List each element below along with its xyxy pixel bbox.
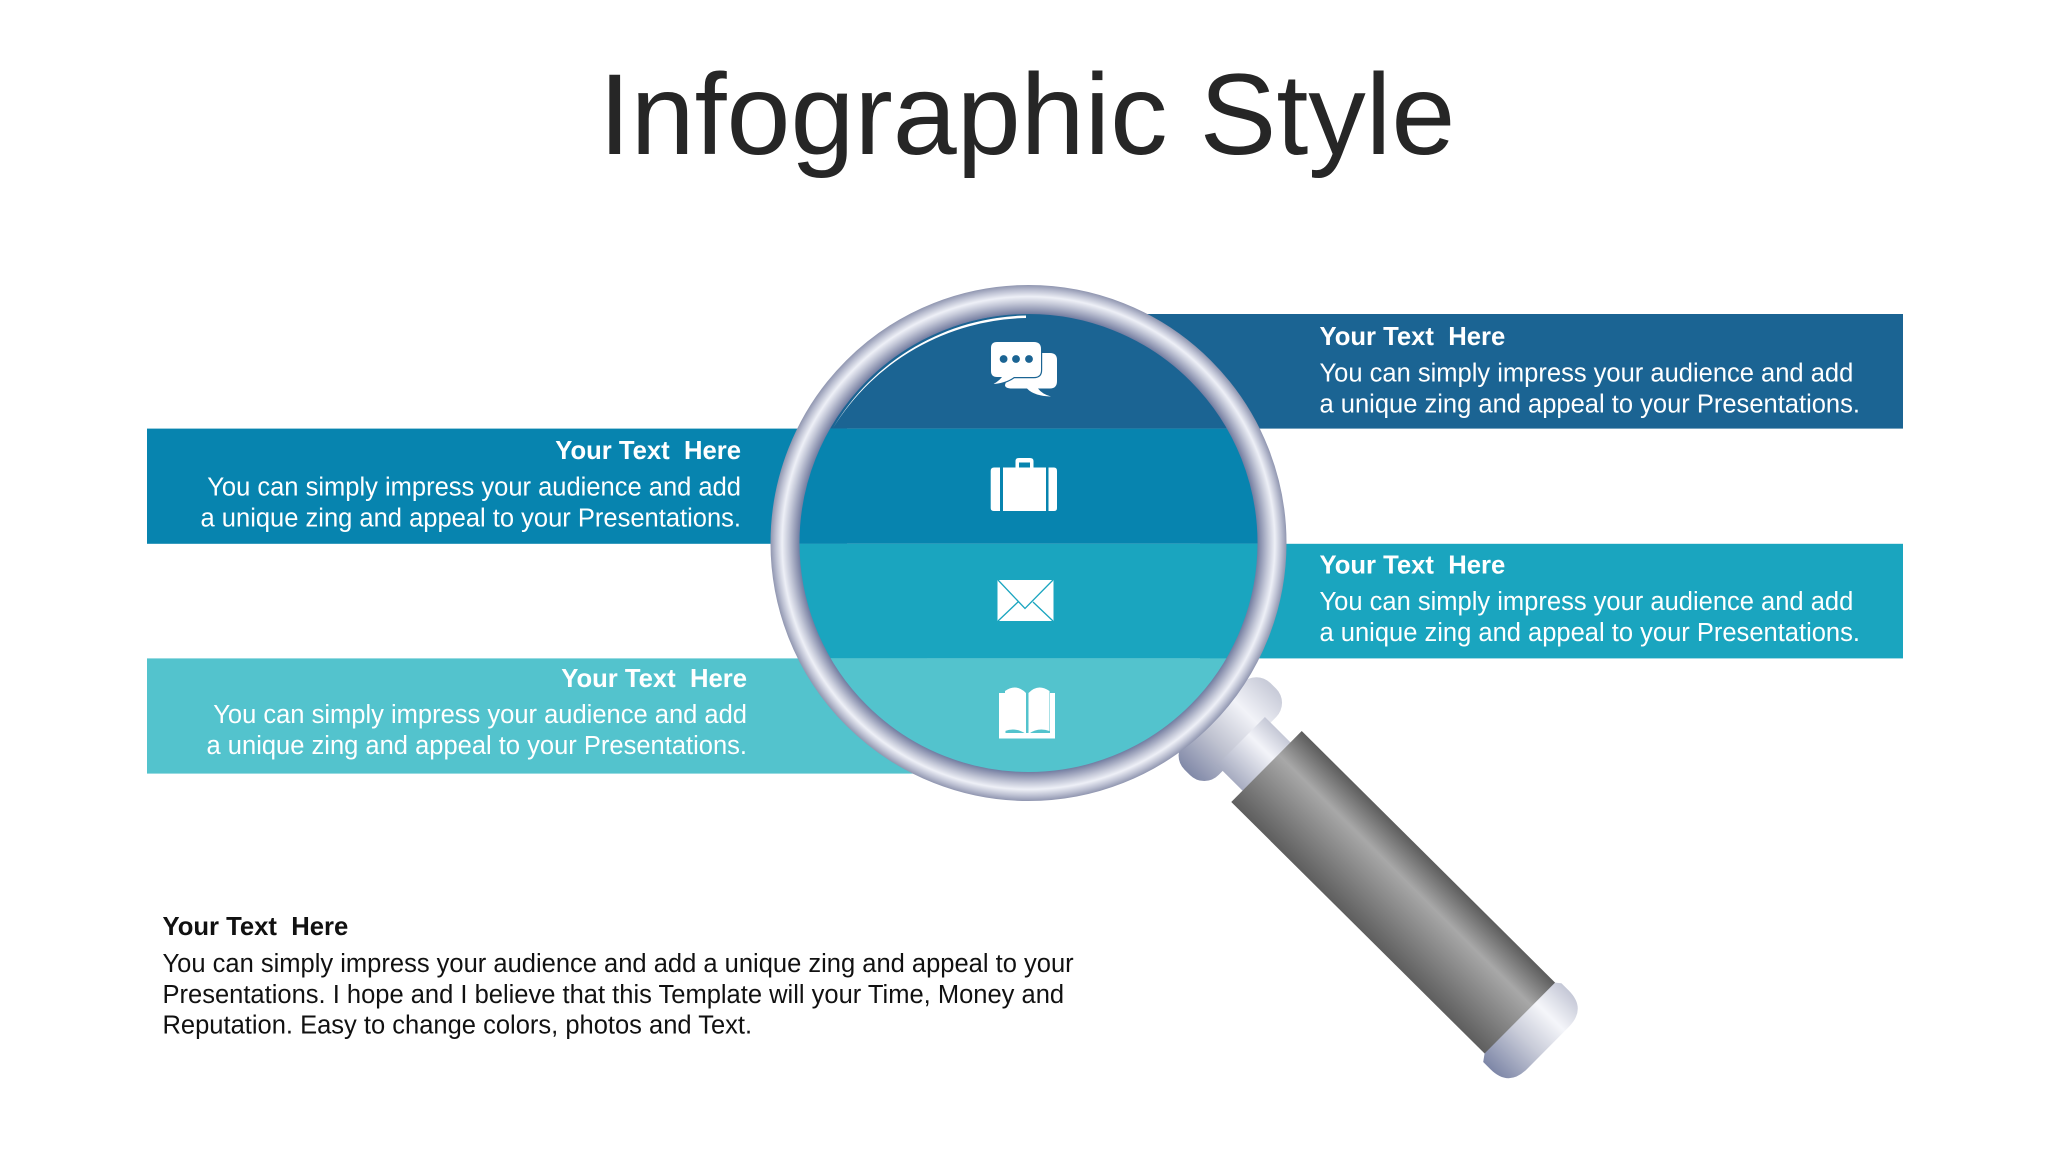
heading: upper left band: Your Text Here [555, 437, 741, 465]
icon: open book [999, 687, 1055, 738]
magnifier ring [785, 300, 1272, 786]
magnifier lens with colored bands [790, 310, 1270, 778]
text: top right band: a unique zing and appeal to your Presentations. [1320, 390, 1860, 418]
handle neck [1217, 717, 1295, 795]
lens highlight arc [833, 316, 1026, 428]
panel: lower left band [147, 658, 927, 774]
panel: upper left band [147, 429, 847, 544]
icon: briefcase [991, 458, 1057, 511]
text: upper left band: a unique zing and appeal to your Presentations. [201, 504, 741, 532]
text: top right band: You can simply impress your audience and add [1320, 360, 1853, 388]
icon: chat bubbles [991, 342, 1057, 396]
magnifying glass handle [1157, 656, 1593, 1090]
body: bottom text: Presentations. I hope and I believe that this Template will your Time, Money and [162, 981, 1064, 1009]
title: Infographic Style [599, 51, 1455, 179]
text: lower left band: a unique zing and appeal to your Presentations. [207, 732, 747, 760]
panel: top right band [1100, 314, 1903, 429]
handle collar [1157, 656, 1290, 789]
heading: lower right band: Your Text Here [1320, 552, 1505, 580]
heading: bottom text: Your Text Here [162, 913, 348, 941]
heading: top right band: Your Text Here [1320, 323, 1505, 351]
handle grip [1231, 731, 1559, 1057]
text: upper left band: You can simply impress your audience and add [207, 474, 741, 502]
handle end cap [1480, 980, 1587, 1087]
heading: lower left band: Your Text Here [561, 665, 747, 693]
bottom text block [162, 913, 1074, 1040]
body: bottom text: Reputation. Easy to change colors, photos and Text. [162, 1012, 752, 1040]
text: lower right band: You can simply impress your audience and add [1320, 588, 1853, 616]
panel: lower right band [1200, 544, 1903, 658]
body: bottom text: You can simply impress your audience and add a unique zing and appeal to your [162, 950, 1074, 978]
icon: envelope [998, 580, 1054, 621]
text: lower left band: You can simply impress your audience and add [213, 701, 747, 729]
text: lower right band: a unique zing and appeal to your Presentations. [1320, 619, 1860, 647]
